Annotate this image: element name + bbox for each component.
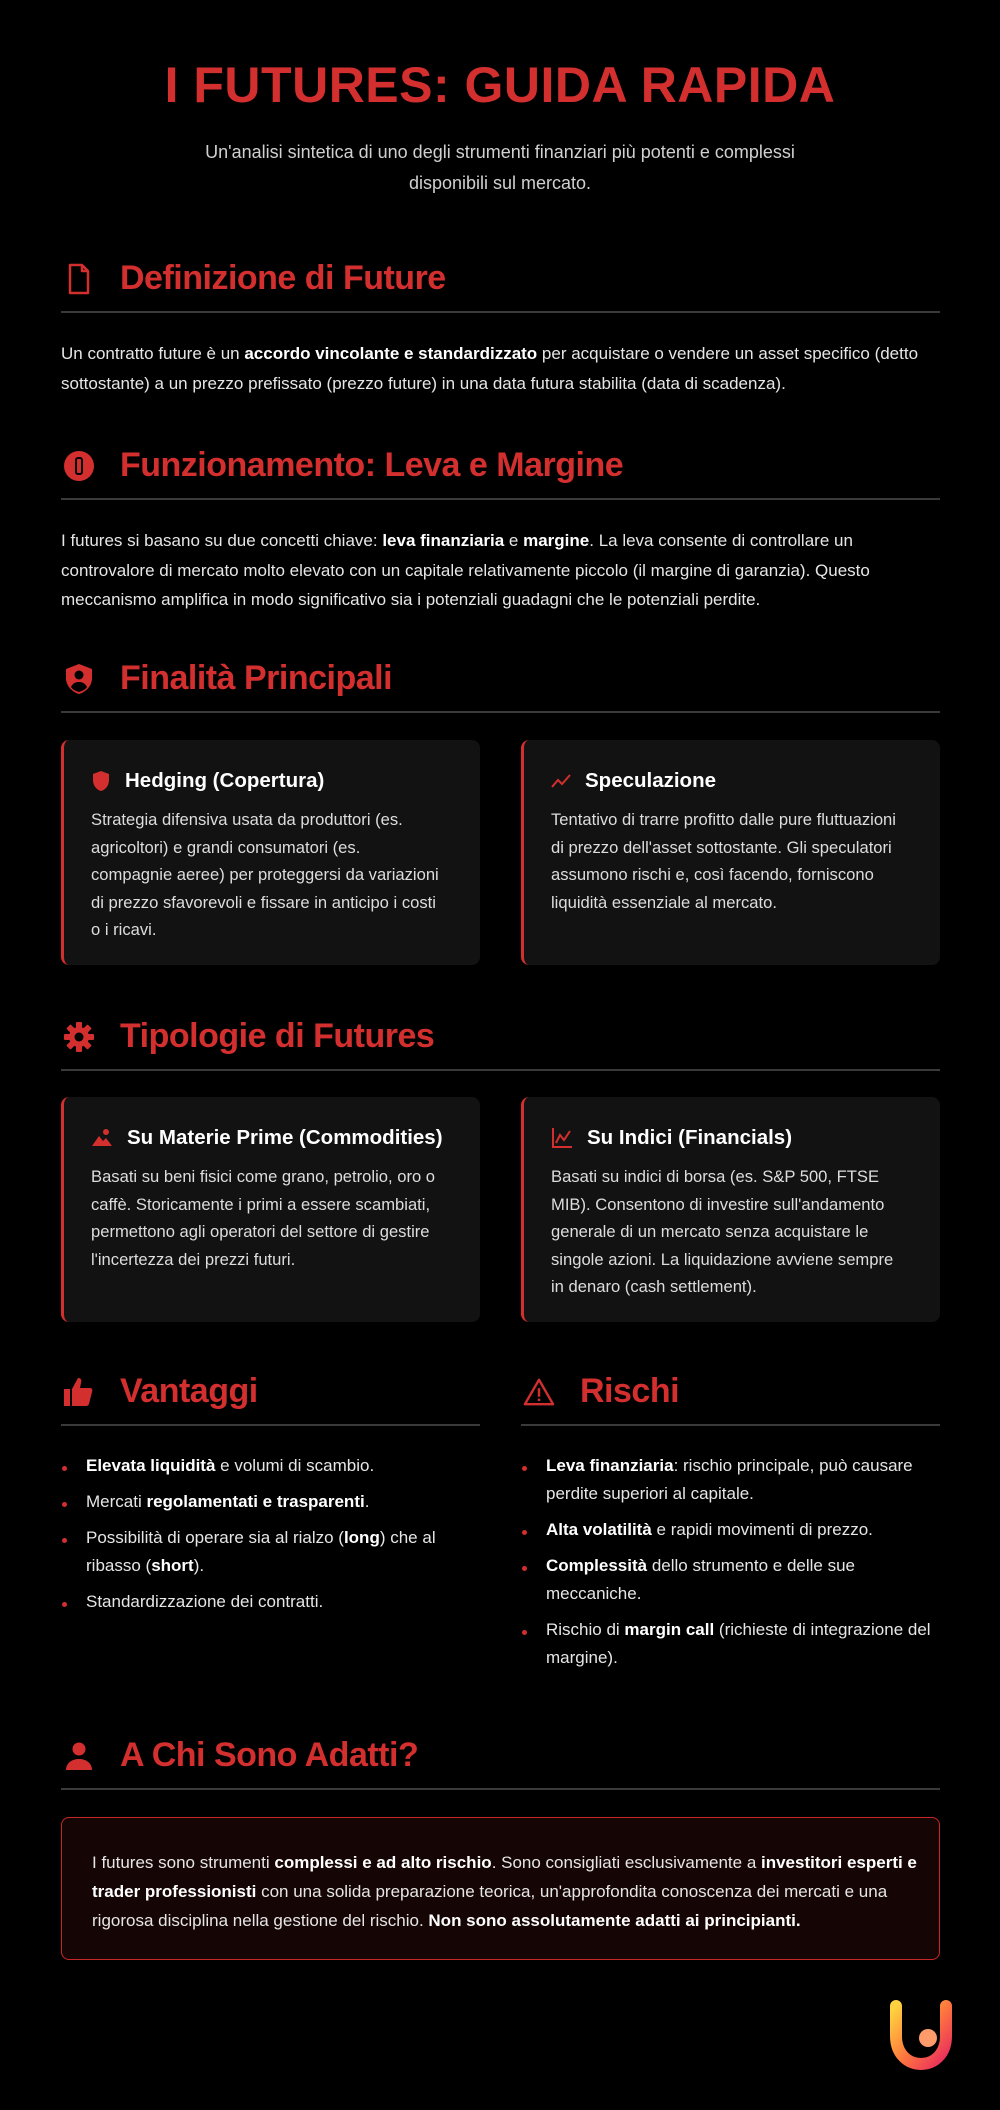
card: hedging: Strategia difensiva usata da produttori (es. agricoltori) e grandi consumatori (es. compagnie aeree) per proteggersi da variazioni di prezzo sfavorevoli e fissare in anticipo i costi o i ricavi. [91, 810, 439, 939]
heading: Definizione di Future: Definizione di Future [120, 259, 446, 297]
card: commodities [61, 1097, 480, 1322]
list: rischi [522, 1456, 931, 1667]
logo [890, 2000, 952, 2070]
heading: Vantaggi [61, 1376, 480, 1426]
list: rischi: Leva finanziaria: rischio principale, può causare perdite superiori al capitale. [546, 1456, 913, 1503]
card: indici [521, 1097, 940, 1322]
list: vantaggi: Possibilità di operare sia al rialzo (long) che al ribasso (short). [86, 1528, 436, 1575]
heading: A Chi Sono Adatti: A Chi Sono Adatti? [120, 1736, 418, 1774]
heading: Finalità: Finalità Principali [120, 659, 392, 697]
subtitle [205, 142, 795, 193]
list: rischi: Rischio di margin call (richieste di integrazione del margine). [546, 1620, 931, 1667]
heading: Rischi: Rischi [580, 1372, 679, 1410]
list: vantaggi: Standardizzazione dei contratti. [86, 1592, 323, 1611]
icon: user [66, 1742, 92, 1770]
heading: Funzionamento [61, 450, 940, 500]
card: speculazione [521, 740, 940, 965]
card: speculazione: Tentativo di trarre profitto dalle pure fluttuazioni di prezzo dell'asset sottostante. Gli speculatori assumono rischi e, così facendo, forniscono liquidità essenziale al mercato. [551, 810, 896, 912]
list: vantaggi [62, 1456, 436, 1611]
card: indici: Basati su indici di borsa (es. S&P 500, FTSE MIB). Consentono di investire sull'andamento generale di un mercato senza acquistare le singole azioni. La liquidazione avviene sempre in denaro (cash settlement). [551, 1167, 893, 1296]
card: speculazione: Speculazione [585, 769, 716, 792]
icon: thumbs up [64, 1378, 92, 1406]
card: indici: Su Indici (Financials) [587, 1126, 792, 1149]
icon: warning [524, 1378, 554, 1406]
icon: gear [64, 1022, 94, 1052]
subtitle: disponibili sul mercato. [409, 173, 591, 193]
icon: info circle [64, 451, 94, 481]
heading: Funzionamento: Funzionamento: Leva e Margine [120, 446, 623, 484]
heading: Finalità [61, 663, 940, 713]
card: hedging [61, 740, 480, 965]
list: vantaggi: Elevata liquidità e volumi di scambio. [86, 1456, 374, 1475]
heading: Rischi [521, 1376, 940, 1426]
callout: warning box: I futures sono strumenti complessi e ad alto rischio. Sono consigliati esclusivamente a investitori esperti e trader professionisti con una solida preparazione teorica, un'approfondita conoscenza dei mercati e una rigorosa disciplina nella gestione del rischio. Non sono assolutamente adatti ai principianti. [92, 1853, 917, 1930]
list: rischi: Alta volatilità e rapidi movimenti di prezzo. [546, 1520, 873, 1539]
heading: A Chi Sono Adatti [61, 1740, 940, 1790]
icon: document [68, 264, 90, 294]
card: hedging: Hedging (Copertura) [125, 769, 324, 792]
list: rischi: Complessità dello strumento e delle sue meccaniche. [546, 1556, 855, 1603]
card: commodities: Basati su beni fisici come grano, petrolio, oro o caffè. Storicamente i primi a essere scambiati, permettono agli operatori del settore di gestire l'incertezza dei prezzi futuri. [91, 1167, 435, 1269]
icon: shield user [66, 664, 92, 694]
list: vantaggi: Mercati regolamentati e trasparenti. [86, 1492, 369, 1511]
heading: Tipologie [61, 1021, 940, 1071]
text: leva e margine: I futures si basano su due concetti chiave: leva finanziaria e margine. La leva consente di controllare un controvalore di mercato molto elevato con un capitale relativamente piccolo (il margine di garanzia). Questo meccanismo amplifica in modo significativo sia i potenziali guadagni che le potenziali perdite. [61, 531, 870, 609]
card: commodities: Su Materie Prime (Commodities) [127, 1126, 443, 1149]
heading: Vantaggi: Vantaggi [120, 1372, 258, 1410]
text: definition: Un contratto future è un accordo vincolante e standardizzato per acquistare o vendere un asset specifico (detto sottostante) a un prezzo prefissato (prezzo future) in una data futura stabilita (data di scadenza). [61, 344, 918, 392]
subtitle: Un'analisi sintetica di uno degli strumenti finanziari più potenti e complessi [205, 142, 795, 162]
callout: warning box [61, 1817, 940, 1960]
heading: Tipologie: Tipologie di Futures [120, 1017, 434, 1055]
heading: Definizione di Future [61, 263, 940, 313]
title: I FUTURES: GUIDA RAPIDA [165, 57, 835, 113]
